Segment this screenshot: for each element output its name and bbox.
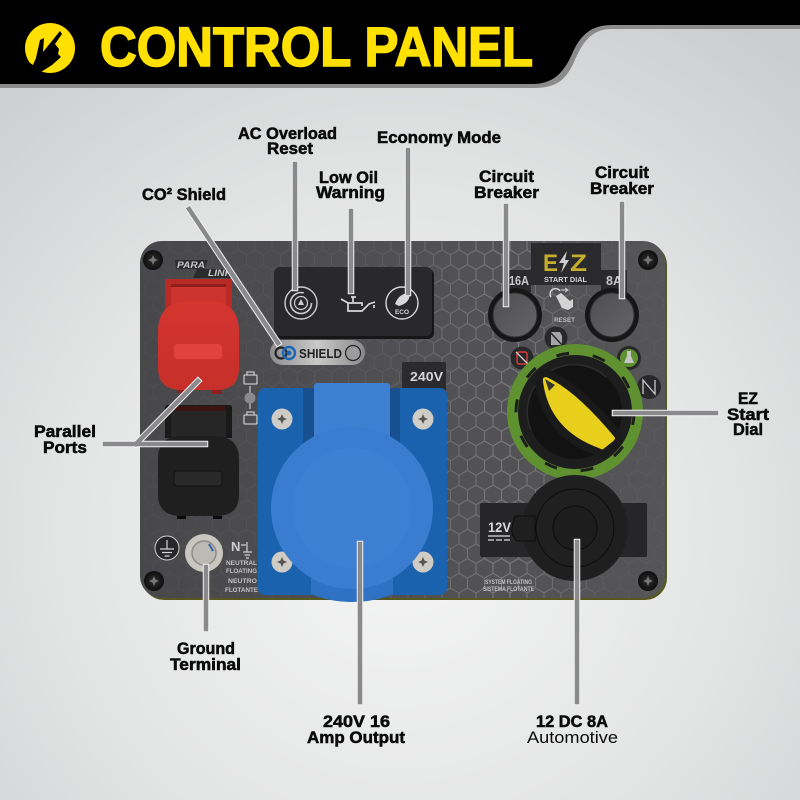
- leader: circuit breaker left: [503, 206, 509, 304]
- neutral floating text: NEUTRAL: [226, 560, 257, 567]
- neutral floating text: FLOATING: [226, 568, 257, 575]
- icon: economy mode: [386, 287, 418, 319]
- yellow knob handle: [539, 373, 619, 454]
- label: parallel ports: Ports: [43, 439, 87, 457]
- EZ start dial badge: [531, 243, 601, 285]
- panel: control panel board: [140, 241, 667, 602]
- label: circuit breaker left: Circuit: [479, 168, 535, 186]
- label: CO2 shield: CO² Shield: [142, 186, 226, 204]
- panel: indicator lights: [274, 267, 434, 339]
- CO shield badge: SHIELD: [299, 347, 342, 361]
- label: 12V automotive: Automotive: [527, 729, 618, 747]
- icon: engine off: [510, 346, 534, 370]
- label: circuit breaker right: Breaker: [590, 180, 655, 198]
- label: parallel ports: Parallel: [34, 423, 96, 441]
- parallel port: red cover: [158, 279, 239, 394]
- label: 12V automotive: 12 DC 8A: [536, 713, 608, 731]
- icon: parallel link symbols: [244, 372, 257, 424]
- leader: low oil warning: [348, 211, 354, 291]
- label: ground terminal: Ground: [177, 640, 235, 658]
- leader: CO2 shield: [189, 209, 278, 343]
- header band: [0, 0, 800, 88]
- icon: reset hand: RESET: [554, 317, 576, 324]
- EZ start dial badge: Z: [570, 250, 587, 277]
- label: 240V output: Amp Output: [307, 729, 406, 747]
- neutral floating text: N: [231, 539, 240, 554]
- label: 12V automotive: [527, 713, 618, 747]
- icon: low oil: [341, 297, 375, 311]
- 12V automotive outlet: [480, 475, 647, 581]
- leader: circuit breaker right: [619, 204, 625, 296]
- parallel port: black cover: [158, 405, 239, 519]
- leader: ground terminal: [203, 567, 209, 629]
- leader: economy mode: [405, 150, 411, 293]
- 12V automotive outlet: 12V: [488, 520, 511, 535]
- icon: AC overload reset: [285, 287, 317, 319]
- label: EZ start dial: Dial: [733, 421, 763, 439]
- leader: 12V output: [574, 542, 580, 702]
- label: circuit breaker left: [474, 168, 540, 202]
- icon: socket screws: [272, 408, 434, 572]
- system floating text: SISTEMA FLOTANTE: [483, 586, 535, 593]
- parallel link logo: LINK: [208, 268, 233, 279]
- label: ground terminal: Terminal: [170, 656, 241, 674]
- neutral floating text: FLOTANTE: [225, 587, 258, 594]
- leader: AC overload reset: [292, 164, 298, 288]
- icon: ground symbol: [155, 536, 179, 560]
- circuit breaker 16A: [488, 270, 542, 342]
- label: 240V output: 240V 16: [323, 713, 390, 731]
- label: AC overload reset: Reset: [267, 140, 314, 158]
- icon: reset hand: [550, 288, 576, 324]
- label: circuit breaker right: Circuit: [595, 164, 650, 182]
- label: EZ start dial: Start: [727, 406, 770, 424]
- label: circuit breaker right: [590, 164, 655, 198]
- icon: fuel off: [544, 326, 568, 350]
- title: CONTROL PANEL: [100, 15, 533, 78]
- system floating text: SYSTEM FLOATING: [485, 579, 532, 586]
- icon: economy mode: ECO: [395, 309, 409, 316]
- CO shield badge: [270, 340, 365, 365]
- label: EZ start dial: EZ: [738, 390, 758, 408]
- label: low oil warning: Warning: [316, 184, 385, 202]
- label: low oil warning: [316, 169, 385, 202]
- leader: 240V output: [357, 544, 363, 702]
- ground terminal: [185, 534, 223, 572]
- label: economy mode: Economy Mode: [377, 129, 501, 147]
- EZ start dial badge: START DIAL: [544, 275, 587, 284]
- label tag: 240V: 240V: [410, 370, 444, 384]
- icon: screw bottom right: [638, 571, 658, 591]
- EZ start dial: [507, 344, 643, 480]
- label tag: 240V: [402, 362, 446, 392]
- 240V blue socket: [258, 383, 447, 602]
- leader: parallel ports: [105, 381, 205, 444]
- icon: screw top left: [143, 250, 163, 270]
- neutral floating text: NEUTRO: [228, 578, 257, 585]
- leader: EZ start dial: [615, 410, 716, 416]
- icon: run: [637, 375, 661, 399]
- label: AC overload reset: AC Overload: [238, 125, 337, 143]
- handle: [174, 471, 222, 486]
- parallel link logo: PARA: [177, 260, 205, 271]
- circuit breaker 8A: [585, 270, 639, 342]
- label: parallel ports: [34, 423, 96, 457]
- label: 240V output: [307, 713, 406, 747]
- label: ground terminal: [170, 640, 241, 674]
- label: EZ start dial: [727, 390, 770, 439]
- handle: [174, 344, 222, 359]
- circuit breaker 16A: 16A: [509, 274, 529, 288]
- system floating text: [483, 579, 535, 593]
- label: low oil warning: Low Oil: [319, 169, 378, 187]
- label: AC overload reset: [238, 125, 337, 158]
- neutral floating text: [225, 539, 258, 594]
- parallel link logo: [175, 260, 235, 279]
- icon: screw top right: [638, 250, 658, 270]
- icon: logo: [20, 23, 75, 78]
- circuit breaker 8A: 8A: [606, 274, 622, 288]
- label: circuit breaker left: Breaker: [474, 184, 540, 202]
- icon: screw bottom left: [144, 571, 164, 591]
- EZ start dial badge: E: [543, 250, 558, 277]
- icon: choke green: [617, 346, 641, 370]
